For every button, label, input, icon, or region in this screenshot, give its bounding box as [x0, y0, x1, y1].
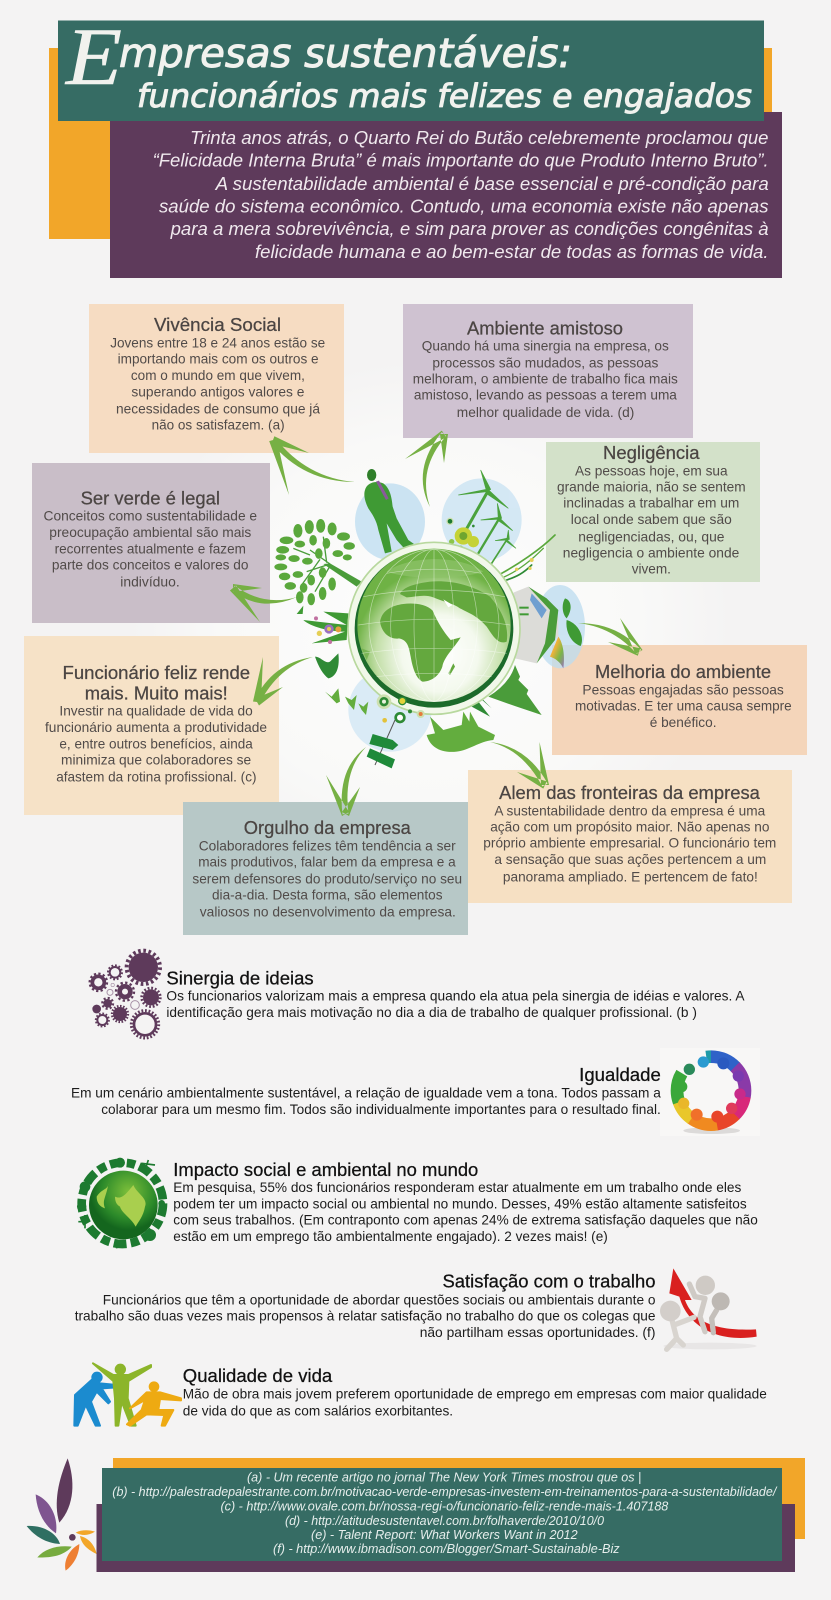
body text: inclinadas a trabalhar em um: [563, 495, 739, 511]
body text: a sensação que suas ações pertencem a um: [494, 851, 766, 867]
heading: mais. Muito mais!: [85, 684, 228, 704]
icon: pine tree: [488, 665, 542, 715]
arrow: to Melhoria do ambiente: [578, 618, 642, 656]
heading: Qualidade de vida: [183, 1366, 333, 1386]
heading: Ser verde é legal: [81, 488, 220, 508]
heading: Ambiente amistoso: [467, 318, 623, 338]
heading: Negligência: [603, 443, 701, 463]
body text: necessidades de consumo que já: [116, 400, 320, 416]
body text: As pessoas hoje, em sua: [575, 462, 728, 478]
icon: signpost: [367, 720, 398, 768]
body text: de vida do que as com salários exorbitantes.: [183, 1402, 453, 1418]
references list: (b) - http://palestradepalestrante.com.br/motivacao-verde-empresas-investem-em-treinamentos-para-a-sustentabilidade/: [112, 1484, 778, 1499]
intro paragraph: felicidade humana e ao bem-estar de todas as formas de vida.: [255, 242, 768, 262]
body text: panorama ampliado. E pertencem de fato!: [503, 868, 758, 884]
body text: identificação gera mais motivação no dia a dia de trabalho de qualquer profissional. (b ): [166, 1004, 697, 1020]
intro paragraph: saúde do sistema econômico. Contudo, uma economia existe não apenas: [159, 196, 768, 216]
icon: cow silhouette: [427, 712, 495, 752]
icon: blue halos: [348, 478, 585, 752]
body text: amistoso, levando as pessoas a terem uma: [414, 387, 677, 403]
body text: ação com um propósito maior. Não apenas no: [490, 819, 770, 835]
body text: superando antigos valores e: [131, 383, 305, 399]
title: [65, 11, 752, 115]
body text: [71, 1084, 661, 1117]
body text: e, entre outros benefícios, ainda: [59, 735, 253, 751]
body text: motivadas. E ter uma causa sempre: [575, 698, 792, 714]
body text: Mão de obra mais jovem preferem oportunidade de emprego em empresas com maior qualidade: [183, 1386, 767, 1402]
block: Sinergia de ideias: [90, 951, 745, 1038]
header orange backing panel: [49, 48, 772, 239]
panel: references: [102, 1468, 782, 1561]
body text: importando mais com os outros e: [118, 351, 319, 367]
body text: [75, 1291, 656, 1340]
body text: serem defensores do produto/serviço no seu: [192, 870, 462, 886]
intro paragraph: [153, 128, 769, 262]
block: Satisfação com o trabalho: [75, 1268, 757, 1349]
panel: Vivência Social: [89, 304, 344, 453]
body text: grande maioria, não se sentem: [557, 479, 746, 495]
references list: (a) - Um recente artigo no jornal The New York Times mostrou que os |: [247, 1470, 641, 1484]
body text: Funcionários que têm a oportunidade de abordar questões sociais ou ambientais durante o: [103, 1291, 656, 1307]
arrow: to Ser verde é legal: [230, 584, 297, 622]
body text: vivem.: [632, 561, 671, 577]
intro paragraph: A sustentabilidade ambiental é base essencial e pré-condição para: [215, 174, 769, 194]
icon: red arrow with figures: [660, 1268, 757, 1349]
heading: Satisfação com o trabalho: [442, 1272, 656, 1292]
icon: flowers and gears bottom: [378, 696, 424, 723]
panel: Alem das fronteiras da empresa: [468, 770, 792, 903]
panel: Funcionário feliz rende mais: [24, 636, 279, 815]
title banner: [58, 11, 764, 121]
heading: Vivência Social: [154, 315, 281, 335]
body text: [44, 508, 257, 590]
body text: trabalho são duas vezes mais propensos à relatar satisfação no trabalho do que os colegas que: [75, 1308, 656, 1324]
body text: [166, 988, 745, 1020]
body text: Os funcionarios valorizam mais a empresa quando ela atua pela sinergia de idéias e valores. A: [166, 988, 745, 1004]
block: Qualidade de vida: [74, 1363, 767, 1426]
body text: parte dos conceitos e valores do: [52, 557, 249, 573]
body text: melhor qualidade de vida. (d): [457, 404, 634, 420]
body text: [192, 837, 462, 919]
body text: processos são mudados, as pessoas: [432, 354, 658, 370]
icon: flowers left: [297, 606, 348, 644]
references list: (f) - http://www.ibmadison.com/Blogger/Smart-Sustainable-Biz: [273, 1541, 620, 1556]
body text: preocupação ambiental são mais: [49, 524, 251, 540]
body text: indivíduo.: [120, 574, 180, 590]
panel: Ambiente amistoso: [403, 304, 693, 438]
body text: Conceitos como sustentabilidade e: [44, 508, 257, 524]
heading: Sinergia de ideias: [166, 968, 314, 988]
arrow: to Ambiente amistoso: [405, 431, 448, 507]
title: E: [65, 11, 122, 102]
icon: tree: [274, 519, 362, 605]
body text: com o mundo em que vivem,: [131, 367, 305, 383]
icon: flowers top: [447, 518, 479, 551]
references list: (d) - http://atitudesustentavel.com.br/folhaverde/2010/10/0: [285, 1513, 605, 1528]
body text: Investir na qualidade de vida do: [59, 703, 253, 719]
panel: Negligência: [546, 442, 760, 582]
footer orange backing panel: [113, 1458, 805, 1539]
heading: Igualdade: [579, 1065, 661, 1085]
body text: local onde sabem que são: [571, 511, 732, 527]
body text: minimiza que colaboradores se: [61, 752, 251, 768]
body text: podem ter um impacto social ou ambiental no mundo. Desses, 49% estão altamente satisfeitos: [173, 1195, 747, 1211]
body text: [173, 1179, 758, 1244]
body text: Quando há uma sinergia na empresa, os: [422, 338, 669, 354]
body text: Jovens entre 18 e 24 anos estão se: [110, 334, 325, 350]
icon: earth with silhouettes: [77, 1158, 165, 1248]
panel: Melhoria do ambiente: [552, 645, 807, 755]
body text: [110, 334, 325, 433]
illustration: green globe with surrounding nature: [274, 469, 585, 768]
body text: não partilham essas oportunidades. (f): [420, 1324, 656, 1340]
body text: [183, 1386, 767, 1418]
body text: [413, 338, 678, 420]
body text: com seus trabalhos. (Em contraponto com apenas 24% de extrema satisfação daqueles que não: [173, 1212, 758, 1228]
footer purple backing panel: [96, 1504, 795, 1572]
icon: wind turbines: [458, 470, 516, 563]
body text: Colaboradores felizes têm tendência a ser: [199, 837, 456, 853]
references list: (c) - http://www.ovale.com.br/nossa-regi-o/funcionario-feliz-rende-mais-1.407188: [220, 1498, 669, 1514]
heading: Alem das fronteiras da empresa: [499, 783, 761, 803]
body text: mais produtivos, falar bem da empresa e a: [198, 854, 456, 870]
icon: businessman: [364, 469, 414, 553]
arrow: to Vivência Social: [269, 436, 355, 495]
intro paragraph: “Felicidade Interna Bruta” é mais importante do que Produto Interno Bruto”.: [153, 150, 769, 170]
icon: globe: [348, 542, 520, 714]
body text: A sustentabilidade dentro da empresa é uma: [494, 802, 765, 818]
body text: Em pesquisa, 55% dos funcionários responderam estar atualmente em um trabalho onde eles: [173, 1179, 741, 1195]
body text: valiosos no desenvolvimento da empresa.: [200, 903, 456, 919]
body text: próprio ambiente empresarial. O funcionário tem: [483, 835, 776, 851]
heading: Funcionário feliz rende: [62, 663, 250, 683]
body text: [575, 681, 792, 730]
body text: dia-a-dia. Desta forma, são elementos: [212, 886, 442, 902]
references list: (e) - Talent Report: What Workers Want in 2012: [311, 1527, 578, 1542]
title: funcionários mais felizes e engajados: [137, 77, 752, 115]
body text: Em um cenário ambientalmente sustentável, a relação de igualdade vem a tona. Todos passam a: [71, 1084, 661, 1100]
arrow: to Alem das fronteiras: [490, 742, 549, 789]
body text: negligencia o ambiente onde: [563, 545, 740, 561]
panel: Orgulho da empresa: [183, 802, 468, 935]
icon: three people: [74, 1363, 181, 1426]
body text: [45, 703, 267, 785]
body text: negligenciadas, ou, que: [578, 528, 725, 544]
arrow: to Orgulho da empresa: [326, 747, 366, 816]
body text: afastem da rotina profissional. (c): [56, 769, 257, 785]
intro paragraph: para a mera sobrevivência, e sim para prover as condições congênitas à: [170, 219, 769, 239]
body text: Pessoas engajadas são pessoas: [582, 681, 784, 697]
body text: recorrentes atualmente e fazem: [55, 540, 246, 556]
continents: [362, 581, 507, 682]
body text: funcionário aumenta a produtividade: [45, 719, 267, 735]
icon: ring of people: [660, 1048, 760, 1136]
arrow: to Funcionário feliz: [253, 657, 313, 706]
intro paragraph: Trinta anos atrás, o Quarto Rei do Butão celebremente proclamou que: [190, 128, 768, 148]
logo: leaves: [27, 1458, 97, 1571]
graticule lines: [358, 549, 510, 701]
body text: colaborar para um mesmo fim. Todos são individualmente importantes para o resultado final.: [101, 1101, 661, 1117]
body text: melhoram, o ambiente de trabalho fica mais: [413, 370, 678, 386]
panel: Ser verde é legal: [32, 463, 270, 623]
block: Igualdade: [71, 1048, 760, 1136]
heading: Melhoria do ambiente: [595, 662, 771, 682]
body text: não os satisfazem. (a): [152, 417, 285, 433]
icon: birds: [315, 653, 492, 717]
body text: [483, 802, 776, 884]
body text: é benéfico.: [650, 714, 716, 730]
icon: gears: [90, 951, 160, 1038]
body text: estão em um emprego tão ambientalmente engajado). 2 vezes mais! (e): [173, 1228, 608, 1244]
icon: building: [513, 587, 582, 668]
body text: [557, 462, 746, 577]
title: mpresas sustentáveis:: [119, 31, 572, 77]
heading: [62, 663, 250, 704]
heading: Impacto social e ambiental no mundo: [173, 1160, 478, 1180]
references list: [112, 1470, 778, 1556]
icon: grass top right: [502, 535, 555, 580]
heading: Orgulho da empresa: [244, 818, 412, 838]
block: Impacto social e ambiental: [77, 1158, 758, 1248]
intro panel: purple: [110, 112, 782, 278]
